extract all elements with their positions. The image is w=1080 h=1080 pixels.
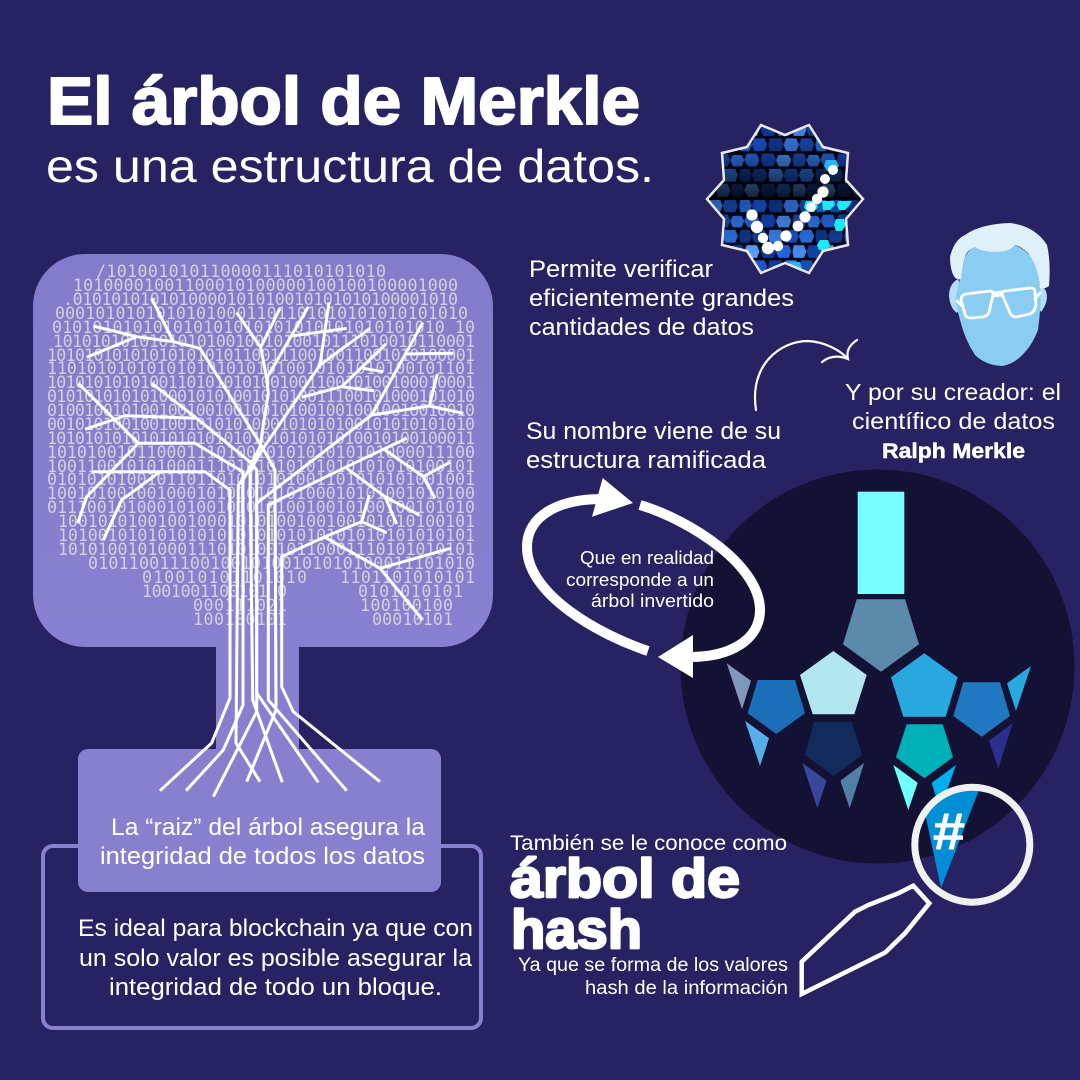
hash tree text: También se le conoce como xyxy=(510,832,787,855)
dark circle xyxy=(680,470,1074,864)
binary digits: 010010101101010 xyxy=(142,568,307,587)
binary digits: 100101010010010001010100100100101010100101 xyxy=(58,512,475,531)
binary digits: 0100100101001001001001001010010010010010010010 xyxy=(47,401,475,420)
panel: tree silhouette xyxy=(33,254,493,892)
binary digits: 0101010100101101101010101001101010101001001 xyxy=(47,470,475,489)
hash tree text: Ya que se forma de los valores xyxy=(518,955,788,976)
check mark xyxy=(746,165,838,254)
ears xyxy=(949,279,1047,313)
root label box xyxy=(78,749,441,892)
hair xyxy=(950,223,1050,288)
hash tree text: árbol de xyxy=(510,847,740,909)
magnified triangle xyxy=(926,790,978,888)
arrow: curved to creator xyxy=(755,340,857,410)
creator text: Ralph Merkle xyxy=(882,440,1025,463)
creator text xyxy=(845,379,1061,463)
chart: inverted merkle tree xyxy=(727,492,1031,810)
binary digits: 101001010101010101010101010101010101010101 xyxy=(58,526,475,545)
binary digits: 10101010101010101001001010010111010010110001 xyxy=(53,332,475,351)
icon: verification badge xyxy=(705,124,865,274)
root label text xyxy=(100,814,425,870)
leaf triangles xyxy=(727,663,1031,810)
hash tree text: hash de la información xyxy=(585,978,788,999)
permite text: eficientemente grandes xyxy=(529,285,794,312)
permite text: cantidades de datos xyxy=(529,314,754,341)
binary digits: /101001010110000111010101010 xyxy=(96,262,386,281)
root node rectangle xyxy=(858,492,904,594)
hash symbol: # xyxy=(933,803,965,861)
binary digits: 0010101001001001010101000101010100101010101010 xyxy=(47,415,475,434)
name origin text: Su nombre viene de su xyxy=(526,418,781,445)
binary digits: 1001001100101 0 xyxy=(142,582,287,601)
icon: portrait of Ralph Merkle xyxy=(949,223,1050,366)
binary digits: 1010101010100110101010100100110010100100010001 xyxy=(47,373,475,392)
binary digits: 1010101010101010101011001110010011001010100001 xyxy=(47,346,475,365)
hash tree text xyxy=(510,832,788,999)
node pentagons xyxy=(748,599,1010,778)
blockchain text: integridad de todo un bloque. xyxy=(109,974,442,1001)
binary digits: 01011001110010010100101010100011101010 xyxy=(88,554,475,573)
binary digits: 00010101 xyxy=(372,610,453,629)
binary digits: 0111001010001010010101010010010100100101010 xyxy=(47,498,475,517)
tree trunk xyxy=(216,640,299,755)
binary digits: 100100100 xyxy=(360,596,453,615)
permite text xyxy=(529,256,794,341)
inverted tree text: árbol invertido xyxy=(591,590,714,611)
binary digits: 1010100101100011101001010101010101000011100 xyxy=(47,443,475,462)
tree branches and roots xyxy=(78,298,463,797)
blockchain text: un solo valor es posible asegurar la xyxy=(79,945,472,972)
face xyxy=(955,245,1041,366)
subtitle: es una estructura de datos. xyxy=(46,140,654,192)
lens ring xyxy=(915,787,1030,902)
binary digits: 0101010101010001010100101010011100101000101010 xyxy=(47,387,475,406)
permite text: Permite verificar xyxy=(529,256,713,283)
blockchain text: Es ideal para blockchain ya que con xyxy=(78,915,473,942)
inverted tree text xyxy=(566,547,714,611)
name origin text xyxy=(526,418,781,474)
cycle arrows xyxy=(527,478,760,678)
binary digits: 1101010101010101010101010010101010100101101 xyxy=(47,359,475,378)
creator text: científico de datos xyxy=(852,408,1055,434)
hash tree text: hash xyxy=(511,898,642,960)
binary digits: 1010101010101010101010101010101010010100100011 xyxy=(47,429,475,448)
root label text: La “raiz” del árbol asegura la xyxy=(111,814,425,841)
tree crown xyxy=(33,254,493,647)
handle xyxy=(802,886,929,994)
panel: bottom outlined box xyxy=(43,846,481,1028)
binary digits: 000111021 xyxy=(193,596,287,615)
blockchain text xyxy=(78,915,473,1001)
binary digits: 1101101010101 xyxy=(340,568,475,587)
inverted tree text: Que en realidad xyxy=(580,547,714,568)
creator text: Y por su creador: el xyxy=(845,379,1061,405)
binary digits: 1001010010010001010101010100010101001010100 xyxy=(47,484,475,503)
name origin text: estructura ramificada xyxy=(526,447,767,474)
binary digits: 0101010101 xyxy=(358,582,463,601)
binary digits: 010101010101010101010101010101010101010 10 xyxy=(52,318,475,337)
binary digits: 1001100101010001110101010101010101010100101 xyxy=(47,457,475,476)
binary digits: 10100001001100010100000100100100001000 xyxy=(73,276,458,295)
glasses xyxy=(957,288,1040,318)
binary digits xyxy=(47,262,475,629)
binary digits: 101010010100011101010010110001110101010101 xyxy=(58,540,475,559)
binary digits: .0101010101010000101010010101010100001010 xyxy=(63,290,458,309)
inverted tree text: corresponde a un xyxy=(566,569,714,590)
icon: magnifying glass xyxy=(799,784,1034,998)
title: El árbol de Merkle xyxy=(47,64,640,139)
root label text: integridad de todos los datos xyxy=(100,843,425,870)
binary digits: 00010101010101010001101101010101010101010 xyxy=(55,304,468,323)
binary digits: 100100101 xyxy=(193,610,287,629)
